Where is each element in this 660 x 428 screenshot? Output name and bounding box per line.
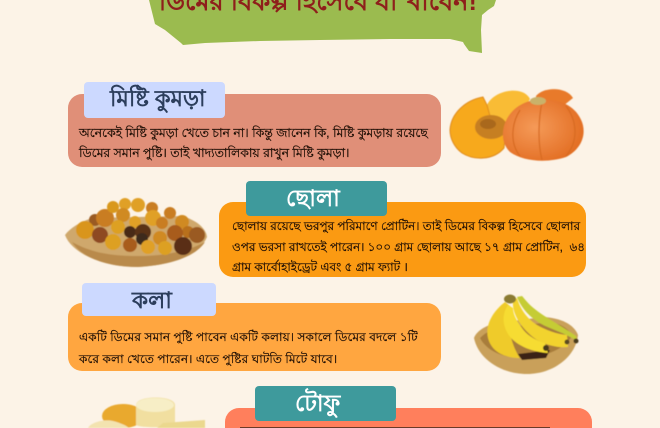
pumpkin panel background <box>68 94 441 167</box>
pumpkin text <box>78 125 428 161</box>
heading: tofu: টোফু <box>295 390 340 416</box>
banana text <box>78 329 418 366</box>
chickpea text: গ্রাম কার্বোহাইড্রেট এবং ৫ গ্রাম ফ্যাট । <box>232 260 408 274</box>
icon: tofu <box>88 397 206 428</box>
title banner: green brush stroke <box>149 0 496 53</box>
heading: pumpkin: মিষ্টি কুমড়া <box>110 86 205 111</box>
icon: chickpea bowl <box>64 197 208 268</box>
panel: chickpea <box>219 181 586 277</box>
chickpea text: ওপর ভরসা রাখতেই পারেন। ১০০ গ্রাম ছোলায় আছে ১৭ গ্রাম প্রোটিন, ৬৪ <box>232 240 585 254</box>
icon: pumpkin <box>448 88 584 162</box>
banana text: করে কলা খেতে পারেন। এতে পুষ্টির ঘাটতি মিটে যাবে। <box>79 352 337 366</box>
chickpea panel background <box>219 202 586 277</box>
chickpea text <box>232 218 585 274</box>
heading: banana <box>82 283 216 316</box>
heading: banana: কলা <box>132 287 172 313</box>
tofu text <box>240 426 550 428</box>
heading: pumpkin <box>84 82 225 118</box>
pumpkin text: অনেকেই মিষ্টি কুমড়া খেতে চান না। কিন্তু জানেন কি, মিষ্টি কুমড়ায় রয়েছে <box>79 126 428 140</box>
banana text: একটি ডিমের সমান পুষ্টি পাবেন একটি কলায়। সকালে ডিমের বদলে ১টি <box>79 330 418 344</box>
heading: chickpea <box>246 181 387 216</box>
panel: tofu <box>225 386 592 428</box>
pumpkin text: ডিমের সমান পুষ্টি। তাই খাদ্যতালিকায় রাখুন মিষ্টি কুমড়া। <box>79 146 349 160</box>
panel: pumpkin <box>68 82 441 167</box>
panel: banana <box>68 283 441 371</box>
chickpea text: ছোলায় রয়েছে ভরপুর পরিমাণে প্রোটিন। তাই ডিমের বিকল্প হিসেবে ছোলার <box>232 219 580 233</box>
heading: tofu <box>255 386 396 421</box>
banana panel background <box>68 303 441 371</box>
tofu panel background <box>225 408 592 428</box>
icon: banana basket <box>473 294 580 375</box>
heading: chickpea: ছোলা <box>286 185 340 211</box>
